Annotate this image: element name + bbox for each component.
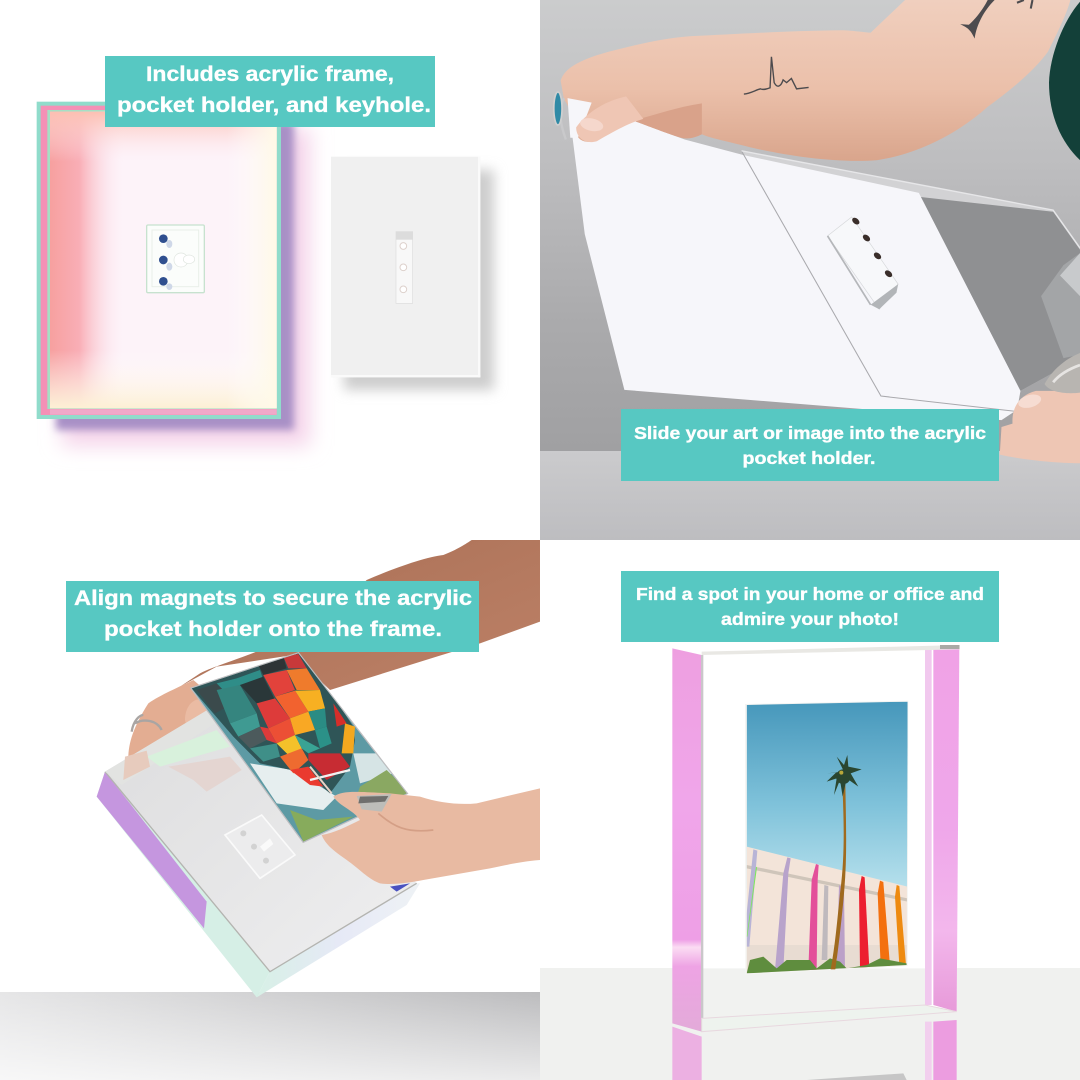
balloon base xyxy=(192,653,355,793)
panel: sliding art into pocket xyxy=(540,0,1080,540)
iridescent acrylic frame xyxy=(97,683,420,997)
acrylic keyhole plate xyxy=(225,815,295,878)
acrylic frame shadow xyxy=(56,122,310,446)
callout: step 4 xyxy=(621,571,999,642)
pocket holder shadow xyxy=(344,170,494,390)
acrylic block with magnets xyxy=(828,216,898,309)
balloon photo xyxy=(192,653,413,842)
right hand xyxy=(322,788,540,892)
callout: step 4: admire your photo! xyxy=(721,609,899,629)
callout: step 3: pocket holder onto the frame. xyxy=(104,617,442,641)
paper sheet xyxy=(568,98,1020,420)
keyhole plate xyxy=(147,225,204,293)
green shirt xyxy=(1049,2,1080,160)
callout: step 1: Includes acrylic frame, xyxy=(146,62,394,86)
right hand with ring xyxy=(1000,353,1080,463)
callout: step 1 xyxy=(105,56,435,127)
arm with tattoos xyxy=(561,0,1070,161)
ring xyxy=(554,92,566,139)
thumbnail xyxy=(580,118,603,132)
table surface xyxy=(0,992,540,1080)
thumb xyxy=(576,96,643,142)
acrylic edges xyxy=(741,151,1080,412)
upper arm xyxy=(180,540,540,690)
panel: acrylic frame and pocket holder xyxy=(36,102,500,454)
acrylic pocket back xyxy=(741,151,1080,412)
clouds and grass xyxy=(250,763,337,810)
reflection xyxy=(672,1020,957,1080)
pocket holder xyxy=(331,157,480,377)
callout: step 1: pocket holder, and keyhole. xyxy=(117,93,431,117)
panel: aligning magnets xyxy=(0,540,540,1080)
palm photo xyxy=(745,701,908,975)
palm tree xyxy=(827,755,862,969)
panel: finished frame on display xyxy=(540,645,1080,1080)
callout: step 3: Align magnets to secure the acrylic xyxy=(74,586,472,610)
callout: step 2: Slide your art or image into the acrylic xyxy=(634,423,986,443)
callout: step 2 xyxy=(621,409,999,481)
callout: step 2: pocket holder. xyxy=(742,448,876,468)
acrylic frame xyxy=(37,102,281,419)
acrylic frame xyxy=(672,645,960,1032)
paper corner held between fingers xyxy=(568,98,592,138)
callout: step 3 xyxy=(66,581,479,652)
left hand xyxy=(128,680,206,756)
table surface xyxy=(540,968,1080,1080)
callout: step 4: Find a spot in your home or office and xyxy=(636,584,984,604)
building wall xyxy=(747,846,907,945)
